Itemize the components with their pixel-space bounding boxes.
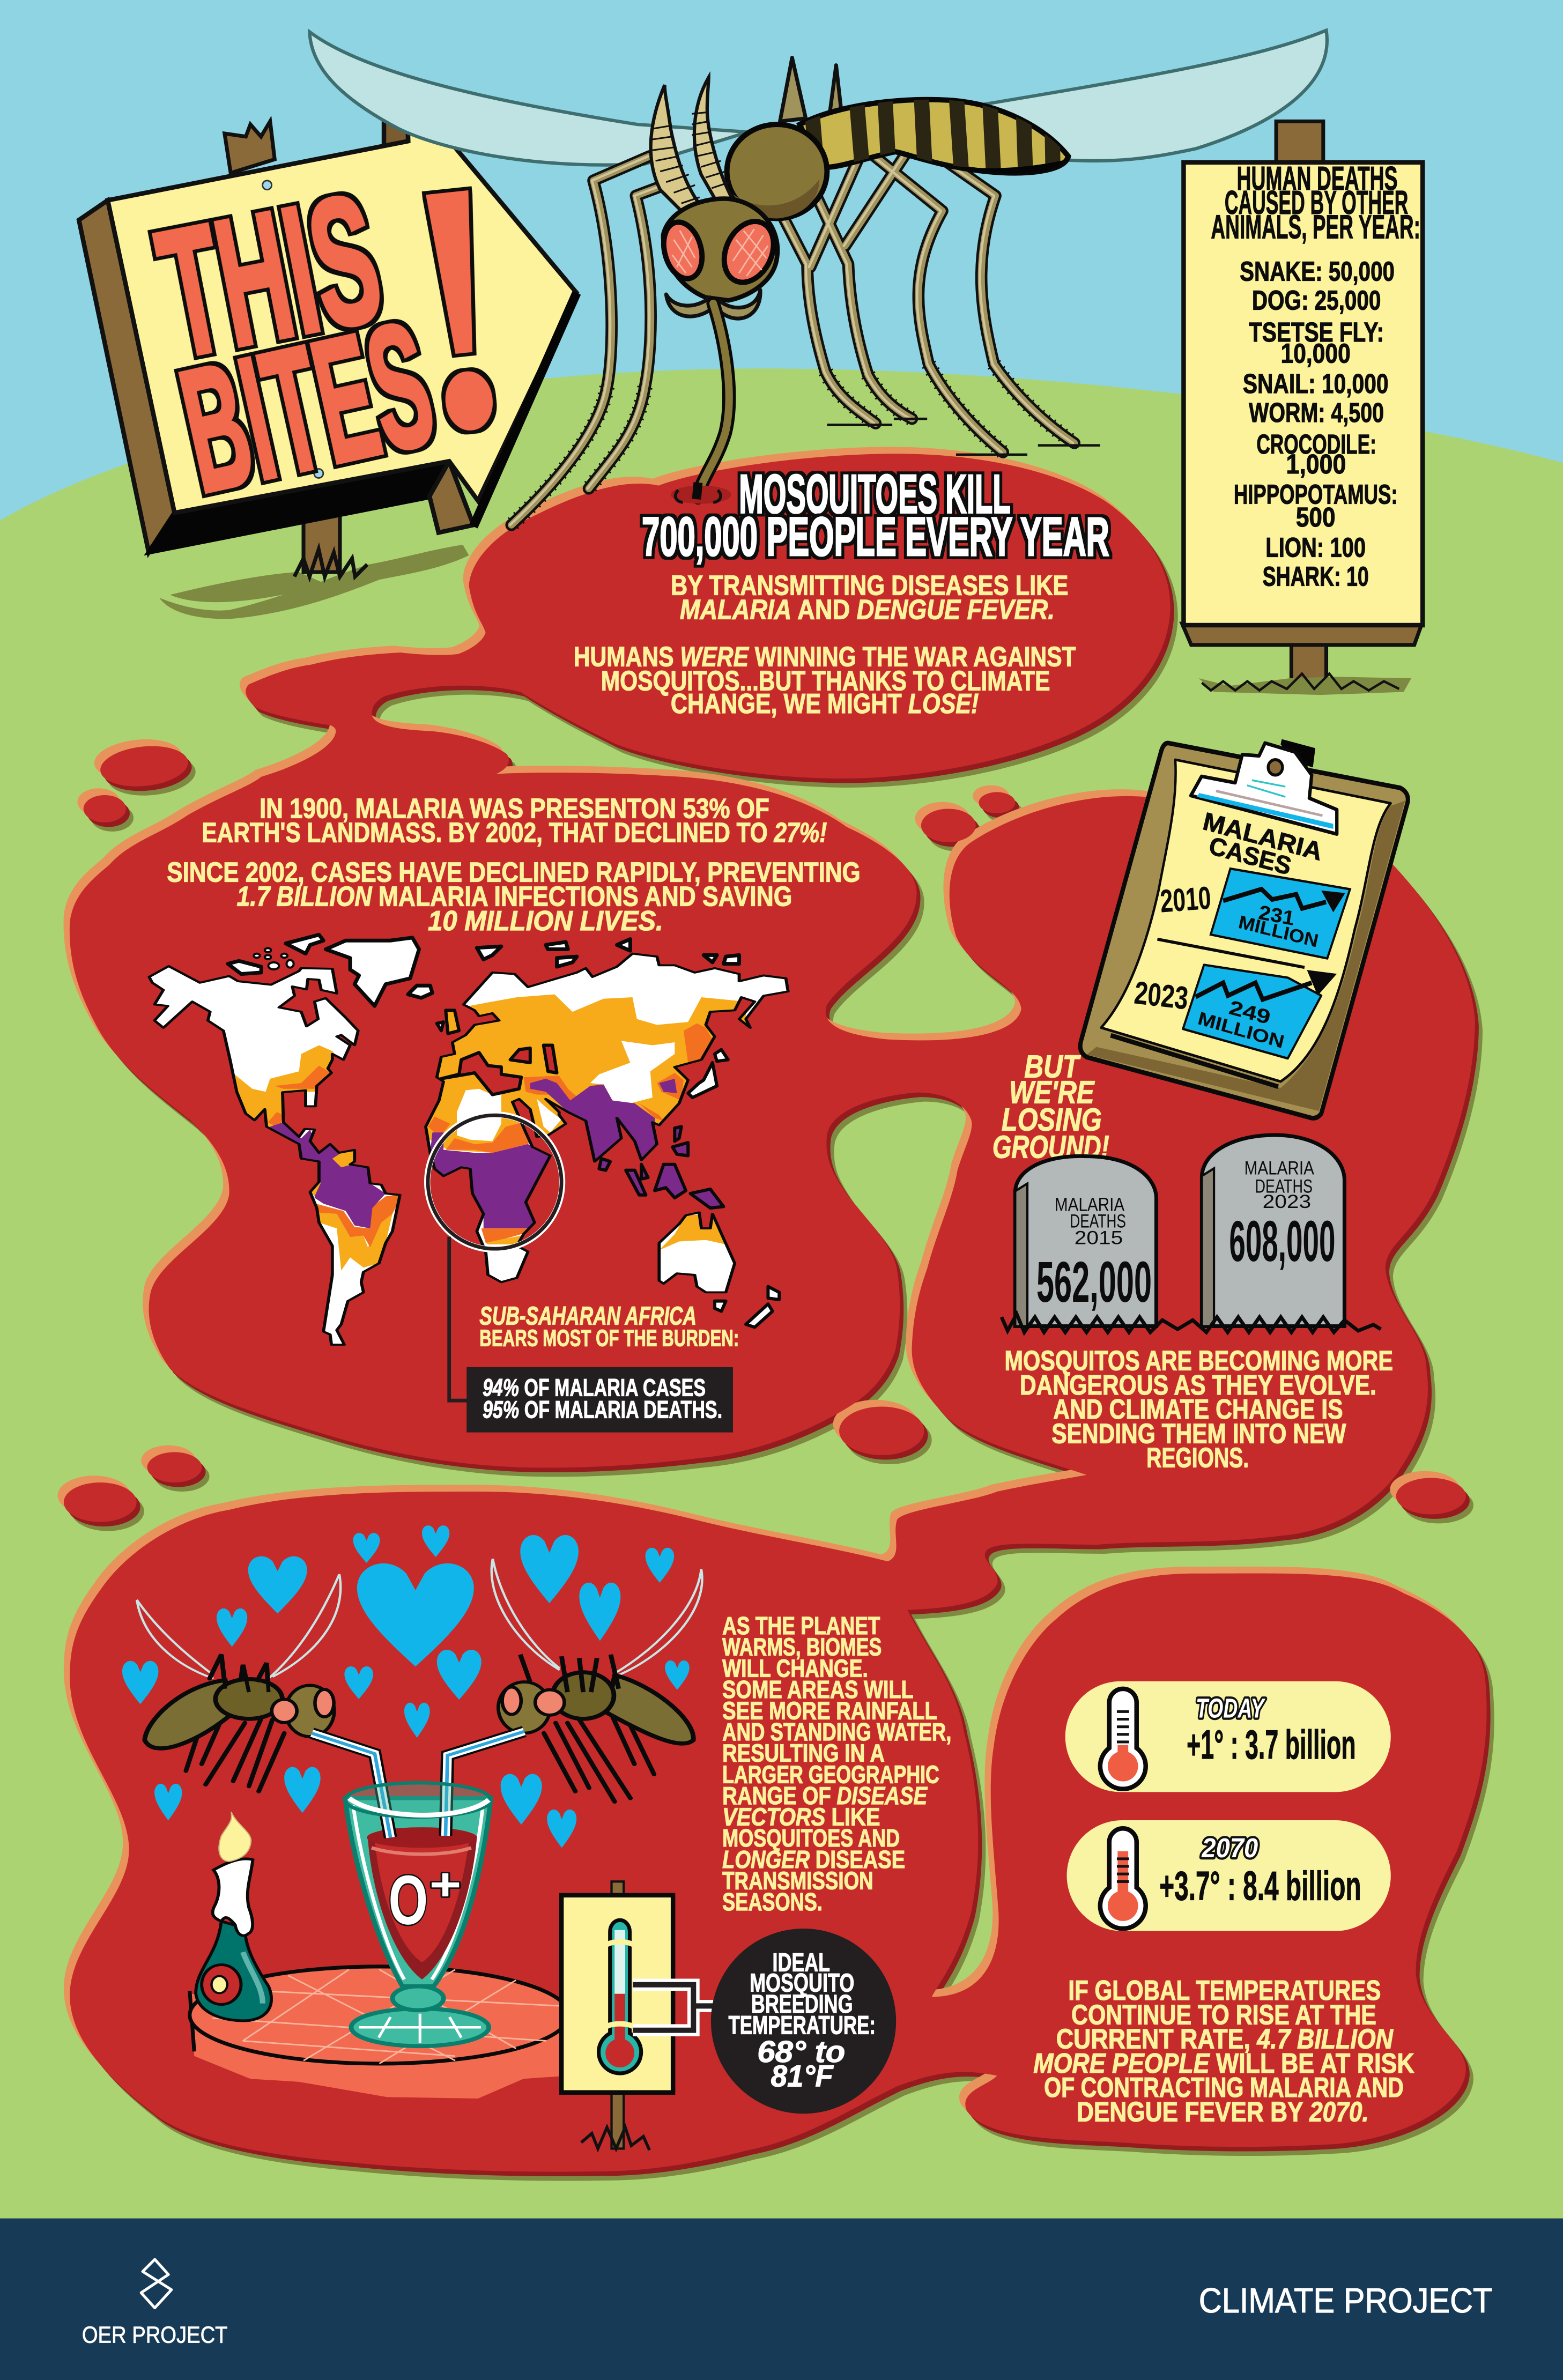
- callout box: share of cases and deaths: [466, 1367, 733, 1433]
- callout: ideal mosquito breeding temperature: 81°F: [771, 2059, 834, 2093]
- text: as the planet warms: LONGER DISEASE: [722, 1845, 905, 1873]
- clipboard heading: [1201, 807, 1325, 880]
- thorax: [727, 124, 827, 219]
- sign list of animals: TSETSE FLY:: [1249, 317, 1384, 347]
- intro text: MALARIA AND DENGUE FEVER.: [680, 595, 1055, 626]
- thermometer icon: [1100, 1828, 1146, 1929]
- malaria history text: [167, 793, 861, 937]
- sign list of animals: 500: [1296, 502, 1335, 532]
- blood type label O+: +: [429, 1858, 461, 1909]
- world map of malaria prevalence: [149, 935, 788, 1345]
- greenland and arctic islands: [228, 935, 739, 1006]
- blood pool background shape: [58, 447, 1494, 2181]
- spikes on the back: [780, 58, 847, 159]
- title: mosquitoes kill 700,000: [642, 464, 1109, 567]
- palps: [666, 290, 760, 318]
- gravestone: malaria deaths 2023: [1202, 1135, 1344, 1326]
- callout: sub-saharan africa lens: [427, 1115, 562, 1400]
- far leg hairs: [512, 364, 1075, 525]
- text: but we're losing ground: [992, 1048, 1109, 1165]
- clipboard 2023 chart: MILLION: [1196, 1009, 1286, 1052]
- text: but we're losing ground: LOSING: [1002, 1101, 1102, 1137]
- text: as the planet warms: SOME AREAS WILL: [722, 1675, 914, 1703]
- sign list of animals: SHARK: 10: [1263, 561, 1369, 591]
- malaria history text: 10 MILLION LIVES.: [428, 906, 663, 937]
- clipboard: malaria cases: [1080, 739, 1408, 1118]
- text: but we're losing ground: WE'RE: [1009, 1074, 1095, 1110]
- mosquito wings: [309, 31, 1327, 165]
- clipboard 2023 chart: 249: [1227, 996, 1273, 1029]
- foot shadows: [827, 419, 1100, 455]
- clipboard heading: CASES: [1206, 831, 1294, 880]
- callout: ideal mosquito breeding temperature: [711, 1929, 896, 2114]
- gravestone: malaria deaths 2015: 562,000: [1036, 1250, 1152, 1314]
- footer band: [0, 2219, 1563, 2380]
- malaria history text: 1.7 BILLION MALARIA INFECTIONS AND SAVING: [236, 881, 792, 913]
- european and asian islands: [437, 1010, 728, 1208]
- sign: This Bites arrow: THIS: [145, 155, 395, 396]
- intro text: MOSQUITOS...BUT THANKS TO CLIMATE: [601, 666, 1050, 697]
- clipboard 2010 chart: [1159, 869, 1350, 959]
- sign list of animals: 10,000: [1281, 338, 1351, 368]
- text: if global temperatures continue: MORE PEOPLE WILL BE AT RISK: [1033, 2048, 1414, 2079]
- temperature bracket: [633, 1985, 713, 2030]
- right mosquito: [492, 1559, 702, 1801]
- sign: This Bites arrow: !: [392, 106, 527, 506]
- lower illustration: mosquitoes and hearts: [122, 1525, 702, 1848]
- text: as the planet warms: TRANSMISSION: [722, 1866, 873, 1894]
- pill: 2070 +3.7 degrees, 8.4 billion: 2070: [1202, 1833, 1258, 1863]
- seas: [441, 1045, 557, 1095]
- clipboard 2010 chart: 231: [1257, 901, 1296, 930]
- logo: OER Project: [82, 2259, 228, 2348]
- intro text: CHANGE, WE MIGHT LOSE!: [671, 688, 979, 720]
- sign list of animals: WORM: 4,500: [1249, 397, 1384, 428]
- pill: today +1 degree, 3.7 billion: [1065, 1681, 1391, 1792]
- text: as the planet warms: SEE MORE RAINFALL: [722, 1696, 937, 1724]
- gravestone: malaria deaths 2023: 2023: [1263, 1191, 1311, 1212]
- text: if global temperatures continue: CURRENT RATE, 4.7 BILLION: [1056, 2024, 1394, 2055]
- sign heading: CAUSED BY OTHER: [1225, 184, 1408, 221]
- text: mosquitos becoming more dangerous: DANGEROUS AS THEY EVOLVE.: [1020, 1370, 1376, 1401]
- clipboard clip: [1191, 739, 1337, 834]
- thermometer icon: [1100, 1689, 1146, 1789]
- title: mosquitoes kill 700,000: MOSQUITOES KILL: [739, 464, 1011, 525]
- sub-saharan africa text: SUB-SAHARAN AFRICA: [479, 1302, 697, 1331]
- text: but we're losing ground: GROUND!: [992, 1129, 1109, 1165]
- text: mosquitos becoming more dangerous: MOSQUITOS ARE BECOMING MORE: [1005, 1346, 1393, 1377]
- table with tablecloth: [190, 1967, 574, 2099]
- clipboard 2023 chart: 2023: [1133, 975, 1190, 1017]
- intro text: HUMANS WERE WINNING THE WAR AGAINST: [574, 641, 1076, 672]
- sign heading: HUMAN DEATHS: [1237, 160, 1398, 197]
- text: as the planet warms: RANGE OF DISEASE: [722, 1782, 928, 1810]
- callout: ideal mosquito breeding temperature: TEMPERATURE:: [728, 2011, 876, 2040]
- americas: [149, 966, 403, 1345]
- mosquito legs: [510, 139, 1075, 525]
- grass under gravestones: [1002, 1314, 1381, 1332]
- sign list of animals: SNAKE: 50,000: [1240, 256, 1395, 287]
- sign list of animals: HIPPOPOTAMUS:: [1234, 479, 1398, 510]
- text: if global temperatures continue: [1033, 1975, 1414, 2127]
- text: but we're losing ground: BUT: [1024, 1048, 1081, 1084]
- text: if global temperatures continue: DENGUE FEVER BY 2070.: [1077, 2096, 1369, 2127]
- gravestone: malaria deaths 2015: MALARIA: [1055, 1194, 1124, 1215]
- malaria history text: IN 1900, MALARIA WAS PRESENTON 53% OF: [260, 793, 769, 824]
- clipboard 2010 chart: MILLION: [1236, 912, 1320, 952]
- sign list of animals: 1,000: [1286, 449, 1346, 479]
- antennae: [651, 77, 731, 220]
- sign list of animals: [1234, 256, 1398, 591]
- sign list of animals: LION: 100: [1265, 532, 1366, 563]
- sign list of animals: DOG: 25,000: [1252, 285, 1381, 315]
- clipboard 2010 chart: 2010: [1159, 880, 1212, 920]
- glass base: [351, 2008, 489, 2046]
- intro text: BY TRANSMITTING DISEASES LIKE: [671, 570, 1068, 601]
- callout: ideal mosquito breeding temperature: IDEAL: [773, 1948, 830, 1977]
- pill: 2070 +3.7 degrees, 8.4 billion: +3.7° : 8.4 billion: [1159, 1863, 1361, 1909]
- head: [663, 199, 777, 300]
- callout: ideal mosquito breeding temperature: MOSQUITO: [750, 1968, 854, 1997]
- pill: today +1 degree, 3.7 billion: +1° : 3.7 billion: [1187, 1722, 1356, 1768]
- gravestone: malaria deaths 2015: DEATHS: [1070, 1211, 1126, 1232]
- sign list of animals: SNAIL: 10,000: [1243, 368, 1389, 399]
- sign: human deaths caused by other animals: [1182, 121, 1423, 695]
- text: if global temperatures continue: IF GLOBAL TEMPERATURES: [1068, 1975, 1381, 2006]
- text: as the planet warms: [722, 1612, 951, 1916]
- sign heading: [1211, 160, 1420, 246]
- milkshake glass of blood with straws: [312, 1731, 524, 2046]
- callout: ideal mosquito breeding temperature: 68° to: [757, 2035, 845, 2068]
- sign with thermometer: [561, 1881, 713, 2150]
- hearts: [122, 1525, 690, 1848]
- callout: ideal mosquito breeding temperature: BREEDING: [751, 1990, 853, 2019]
- text: as the planet warms: AS THE PLANET: [722, 1612, 880, 1640]
- eyes: [658, 213, 783, 291]
- footer: Climate Project: CLIMATE PROJECT: [1199, 2281, 1492, 2320]
- callout box: share of cases and deaths: 95% OF MALARIA DEATHS.: [483, 1396, 722, 1423]
- text: as the planet warms: SEASONS.: [722, 1888, 823, 1916]
- text: mosquitos becoming more dangerous: [1005, 1346, 1393, 1474]
- pill: today +1 degree, 3.7 billion: TODAY: [1196, 1693, 1265, 1724]
- clipboard 2023 chart: [1133, 965, 1337, 1058]
- gravestone: malaria deaths 2015: [1015, 1156, 1157, 1326]
- left mosquito: [137, 1574, 340, 1791]
- sign heading: ANIMALS, PER YEAR:: [1211, 209, 1420, 246]
- blood type label O+: O: [389, 1861, 428, 1939]
- text: if global temperatures continue: OF CONTRACTING MALARIA AND: [1044, 2072, 1404, 2103]
- gravestone: malaria deaths 2023: MALARIA: [1245, 1158, 1314, 1178]
- text: as the planet warms: VECTORS LIKE: [722, 1803, 880, 1831]
- eurasia and africa: [417, 954, 788, 1282]
- proboscis: [698, 303, 729, 498]
- blood: [368, 1836, 477, 1979]
- pill: 2070 +3.7 degrees, 8.4 billion: [1067, 1820, 1391, 1931]
- glass body: [345, 1798, 491, 1986]
- sky background: [0, 0, 1563, 607]
- sub-saharan africa text: BEARS MOST OF THE BURDEN:: [479, 1325, 739, 1351]
- text: as the planet warms: RESULTING IN A: [722, 1739, 885, 1767]
- thermometer: [598, 1920, 641, 2073]
- malaria history text: SINCE 2002, CASES HAVE DECLINED RAPIDLY, PREVENTING: [167, 857, 861, 888]
- mosquito illustration: [309, 31, 1327, 525]
- logo: OER Project: OER PROJECT: [82, 2322, 228, 2348]
- text: as the planet warms: LARGER GEOGRAPHIC: [722, 1760, 939, 1788]
- bite mark: [671, 483, 731, 504]
- gravestone: malaria deaths 2023: 608,000: [1229, 1209, 1335, 1273]
- callout box: share of cases and deaths: 94% OF MALARIA CASES: [483, 1374, 706, 1402]
- malaria history text: EARTH'S LANDMASS. BY 2002, THAT DECLINED TO 27%!: [202, 818, 827, 849]
- glass rim: [345, 1783, 491, 1817]
- straws: [312, 1731, 524, 1837]
- text: mosquitos becoming more dangerous: SENDING THEM INTO NEW: [1051, 1418, 1346, 1449]
- text: as the planet warms: WARMS, BIOMES: [722, 1633, 881, 1661]
- text: if global temperatures continue: CONTINUE TO RISE AT THE: [1071, 1999, 1376, 2030]
- text: as the planet warms: MOSQUITOES AND: [722, 1824, 900, 1852]
- gravestone: malaria deaths 2015: 2015: [1075, 1228, 1123, 1249]
- candle in bottle: [196, 1812, 271, 2021]
- title: mosquitoes kill 700,000: 700,000 PEOPLE EVERY YEAR: [642, 506, 1109, 567]
- sign list of animals: CROCODILE:: [1256, 429, 1376, 459]
- clipboard heading: MALARIA: [1201, 807, 1325, 866]
- sign: This Bites arrow: [79, 90, 576, 619]
- text: mosquitos becoming more dangerous: AND CLIMATE CHANGE IS: [1053, 1394, 1343, 1425]
- australia and new zealand: [659, 1212, 779, 1327]
- text: mosquitos becoming more dangerous: REGIONS.: [1146, 1443, 1249, 1474]
- striped abdomen: [796, 97, 1071, 176]
- sign: This Bites arrow: BITES: [166, 285, 448, 530]
- text: as the planet warms: AND STANDING WATER,: [722, 1718, 951, 1746]
- intro text: [574, 570, 1076, 720]
- sub-saharan africa text: [479, 1302, 739, 1351]
- gravestone: malaria deaths 2023: DEATHS: [1255, 1176, 1313, 1197]
- text: as the planet warms: WILL CHANGE.: [722, 1654, 868, 1682]
